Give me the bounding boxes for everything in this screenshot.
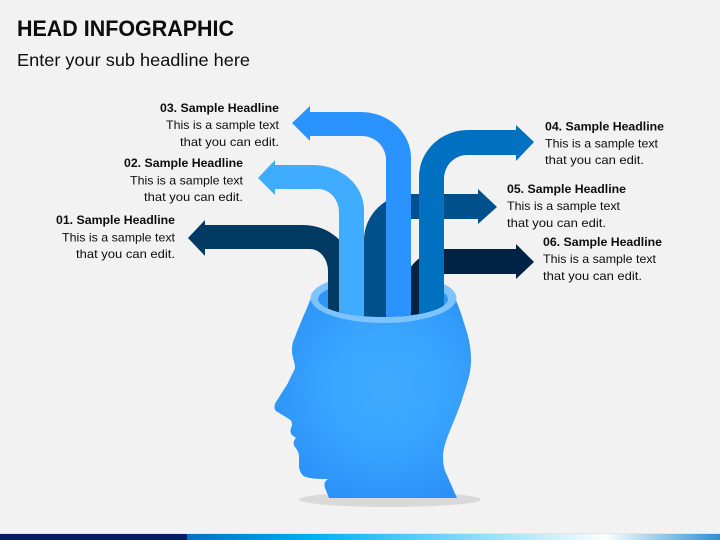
head silhouette bbox=[274, 298, 471, 498]
head illustration bbox=[274, 273, 471, 498]
label 01: 01. Sample Headline bbox=[56, 213, 175, 227]
rim opening bbox=[318, 281, 448, 317]
label 04: 04. Sample Headline bbox=[545, 120, 664, 134]
label 05: that you can edit. bbox=[507, 216, 606, 230]
arrow 04 bbox=[419, 125, 534, 320]
label 01: This is a sample text bbox=[62, 230, 176, 244]
label 04: that you can edit. bbox=[545, 153, 644, 167]
arrow 02 bbox=[258, 160, 364, 320]
label 05: 05. Sample Headline bbox=[507, 182, 626, 196]
label 06: This is a sample text bbox=[543, 252, 657, 266]
label 02: This is a sample text bbox=[130, 174, 244, 188]
arrow 01 bbox=[188, 220, 352, 320]
subtitle: Enter your sub headline here bbox=[17, 50, 250, 70]
footer bar bbox=[0, 533, 720, 540]
label 06: 06. Sample Headline bbox=[543, 235, 662, 249]
ground shadow bbox=[299, 492, 481, 507]
rim bbox=[310, 273, 456, 323]
label 04 bbox=[545, 120, 664, 167]
label 03: 03. Sample Headline bbox=[160, 101, 279, 115]
label 04: This is a sample text bbox=[545, 136, 659, 150]
label 03: that you can edit. bbox=[180, 135, 279, 149]
label 02 bbox=[124, 156, 244, 204]
label 06 bbox=[543, 235, 662, 283]
label 06: that you can edit. bbox=[543, 269, 642, 283]
label 01: that you can edit. bbox=[76, 247, 175, 261]
title: HEAD INFOGRAPHIC bbox=[17, 16, 234, 41]
arrows group bbox=[188, 106, 534, 320]
label 01 bbox=[56, 213, 176, 261]
label 05 bbox=[507, 182, 626, 230]
label 03 bbox=[160, 101, 280, 149]
label 02: that you can edit. bbox=[144, 190, 243, 204]
arrow 05 bbox=[364, 189, 497, 320]
arrow 06 bbox=[400, 244, 534, 320]
label 05: This is a sample text bbox=[507, 199, 621, 213]
arrow 03 bbox=[292, 106, 411, 320]
label 02: 02. Sample Headline bbox=[124, 156, 243, 170]
label 03: This is a sample text bbox=[166, 118, 280, 132]
